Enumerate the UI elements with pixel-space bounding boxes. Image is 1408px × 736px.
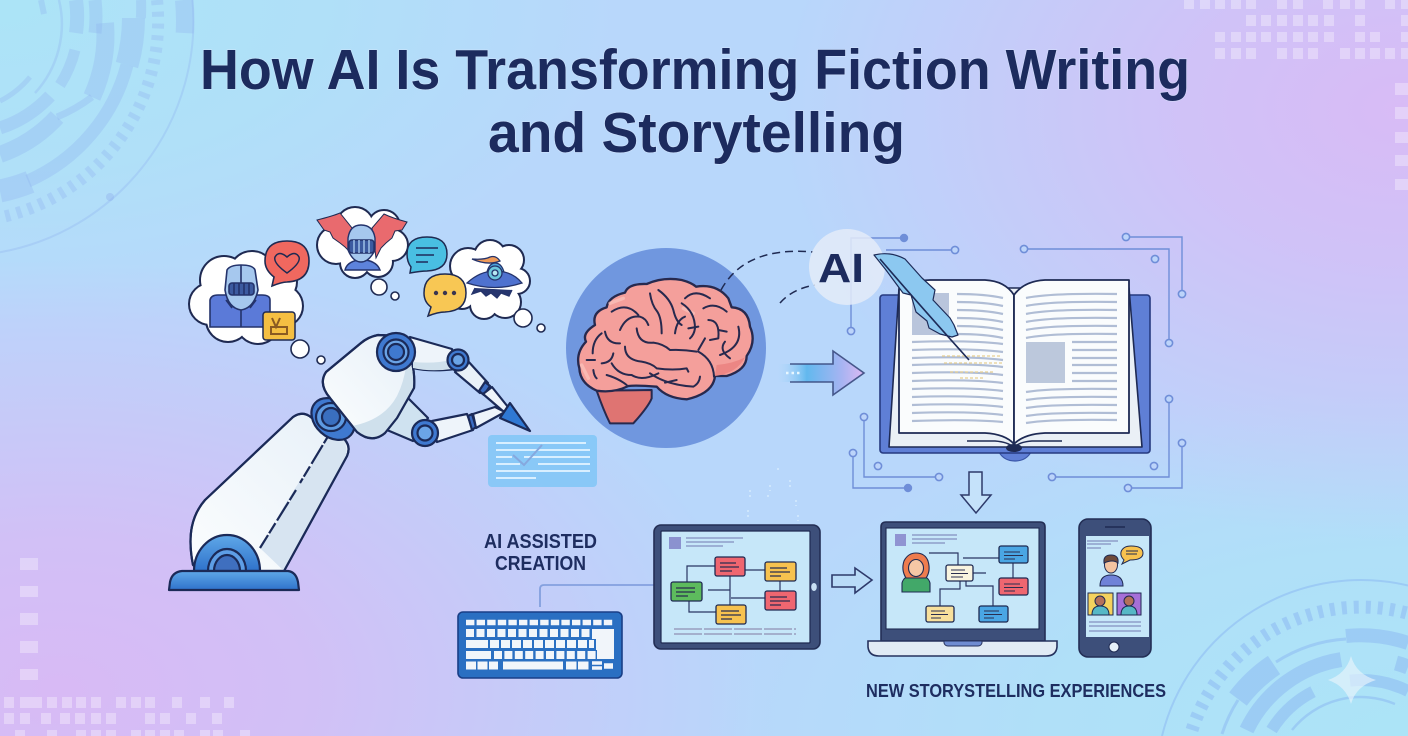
arm: shoulder joint bbox=[303, 390, 363, 448]
keyboard bbox=[458, 612, 622, 678]
smartphone bbox=[1079, 519, 1151, 657]
brain circle bbox=[566, 248, 766, 448]
card: written note bbox=[488, 435, 597, 487]
AI badge: AI bbox=[818, 245, 864, 291]
decoration: top-right pixel grid bbox=[1184, 0, 1408, 190]
decoration: bottom-right tech rings bbox=[1162, 580, 1408, 736]
arrow: tablet to laptop bbox=[832, 568, 872, 593]
icon: red wings bbox=[317, 213, 407, 258]
laptop: interactive story bbox=[868, 522, 1057, 656]
arm: elbow joint bbox=[377, 333, 415, 371]
arrow: book down to devices bbox=[961, 472, 991, 513]
right page bbox=[1014, 280, 1129, 444]
thought bubbles bbox=[291, 340, 325, 364]
AI badge bbox=[809, 229, 885, 305]
story nodes bbox=[671, 557, 796, 624]
thought bubbles bbox=[371, 279, 399, 300]
story nodes bbox=[926, 546, 1028, 622]
arm: main body bbox=[323, 335, 414, 438]
decoration: faint sparkle dots bbox=[748, 468, 798, 521]
icon: flying saucer bbox=[467, 256, 522, 298]
arm: lower claw link bbox=[387, 397, 428, 441]
label: AI assisted creation: CREATION bbox=[495, 553, 586, 575]
phone avatar with bubble bbox=[1100, 546, 1143, 586]
arm: upper finger bbox=[410, 337, 508, 412]
page illustrations bbox=[912, 293, 949, 335]
story map connectors bbox=[687, 566, 780, 612]
tablet footer lines bbox=[674, 629, 796, 634]
icon: yellow ellipsis speech bubble bbox=[424, 274, 466, 316]
thought cloud: armored knight with heart bbox=[190, 241, 325, 364]
icon: feather quill bbox=[874, 254, 969, 360]
laptop base bbox=[868, 641, 1057, 656]
title: and Storytelling bbox=[488, 101, 905, 165]
decoration: bottom-left pixel grid bbox=[4, 558, 250, 736]
title: How AI Is Transforming Fiction Writing bbox=[200, 38, 1190, 102]
phone profile photos bbox=[1088, 593, 1141, 615]
label: new storytelling experiences: NEW STORYSTELLING EXPERIENCES bbox=[866, 681, 1166, 701]
story connectors bbox=[929, 553, 1013, 606]
arm: base plate bbox=[169, 571, 299, 590]
label: AI assisted creation: AI ASSISTED bbox=[484, 531, 597, 553]
connector: keyboard to tablet bbox=[540, 585, 654, 607]
icon: heart speech bubble bbox=[265, 241, 309, 286]
dashed links from brain to AI bbox=[721, 251, 815, 303]
glowing arrow bbox=[776, 351, 864, 395]
page stack bbox=[889, 288, 1142, 447]
title bbox=[200, 38, 1190, 165]
icon: knight helmet bbox=[345, 225, 380, 270]
icon: brain bbox=[578, 279, 753, 423]
arm: base hub bbox=[194, 535, 260, 571]
circuit traces around the book bbox=[847, 233, 1186, 492]
arm: lower segment bbox=[190, 414, 349, 571]
robot arm bbox=[169, 333, 530, 590]
page text lines bbox=[912, 294, 1117, 423]
thought bubbles bbox=[514, 309, 545, 332]
decoration: four-point sparkle bbox=[1328, 656, 1376, 704]
label: AI assisted creation bbox=[484, 531, 597, 575]
icon: yellow badge bbox=[263, 312, 295, 340]
thought cloud: spaceship bbox=[449, 241, 545, 332]
laptop header bbox=[895, 534, 957, 546]
left page bbox=[899, 280, 1014, 444]
open book bbox=[880, 280, 1150, 461]
thought cloud: winged knight bbox=[317, 208, 407, 300]
gold ink sparkle text bbox=[942, 356, 1002, 378]
tablet: story map bbox=[654, 525, 820, 649]
arm: lower finger bbox=[412, 407, 505, 446]
icon: knight figure bbox=[210, 265, 270, 327]
icon: blue text speech bubble bbox=[407, 237, 447, 273]
decoration: top-left tech rings bbox=[0, 0, 469, 466]
tablet header bbox=[669, 537, 743, 549]
arm: pen tip bbox=[500, 403, 530, 431]
icon: woman avatar bbox=[902, 553, 930, 592]
page bottom stack lines bbox=[967, 441, 1062, 447]
book cover bbox=[880, 295, 1150, 461]
